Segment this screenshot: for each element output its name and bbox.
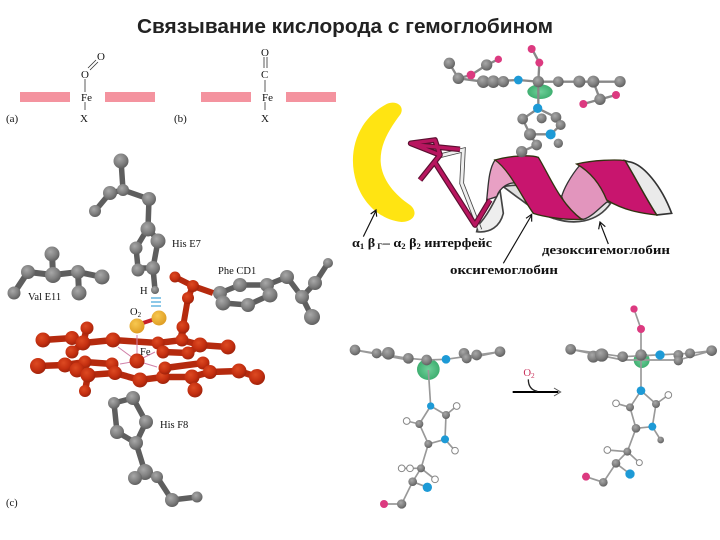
- title: Связывание кислорода с гемоглобином: [137, 16, 553, 38]
- heme plane bars b: [201, 92, 336, 102]
- reaction arrow with oxygen: [513, 368, 561, 396]
- residue: His E7: [89, 154, 166, 294]
- deoxy heme model: [350, 345, 505, 509]
- atom labels b: X: [261, 113, 269, 125]
- panel c: heme pocket ball and stick model: [6, 154, 333, 509]
- residue and atom labels c: Fe: [140, 347, 151, 358]
- atom labels b: (b): [174, 113, 187, 125]
- residue and atom labels c: Phe CD1: [218, 266, 256, 277]
- residue: His F8: [108, 391, 202, 507]
- panel a: oxygen bound to heme iron: [6, 51, 155, 125]
- panel b: carbon monoxide bound to heme iron: [174, 47, 336, 125]
- bound oxygen molecule: [130, 310, 166, 334]
- helix labels: β: [406, 235, 417, 250]
- atom labels a: O: [81, 69, 89, 81]
- atom labels b: Fe: [262, 92, 273, 104]
- pointer arrows: [363, 210, 608, 263]
- interface yellow crescent: [353, 103, 415, 222]
- atom labels a: [6, 51, 105, 125]
- helix ribbon: [411, 140, 672, 232]
- panel: deoxy to oxy transition: [350, 305, 717, 509]
- reaction arrow with oxygen: 2: [531, 371, 535, 380]
- helix labels: интерфейс: [421, 235, 492, 250]
- helix labels: дезоксигемоглобин: [542, 242, 671, 257]
- residue and atom labels c: H: [140, 286, 148, 297]
- residue and atom labels c: His E7: [172, 239, 201, 250]
- panel: helix shift diagram: [353, 45, 672, 263]
- residue and atom labels c: His F8: [160, 420, 188, 431]
- residue: Val E11: [8, 246, 110, 300]
- heme group: [30, 272, 265, 398]
- atom labels a: (a): [6, 113, 19, 125]
- helix labels: – α: [382, 235, 402, 250]
- atom labels b: C: [261, 69, 268, 81]
- helix labels: 1: [360, 242, 364, 251]
- heme plane bars a: [20, 92, 155, 102]
- atom labels a: Fe: [81, 92, 92, 104]
- atom labels a: X: [80, 113, 88, 125]
- bonds b: [264, 57, 267, 110]
- helix labels: 2: [401, 242, 406, 251]
- residue and atom labels c: Val E11: [28, 292, 61, 303]
- helix labels: β: [364, 235, 375, 250]
- helix labels: 2: [417, 242, 421, 251]
- atom labels b: O: [261, 47, 269, 59]
- helix labels: α: [352, 235, 359, 250]
- residue: Phe CD1: [213, 258, 333, 325]
- residue and atom labels c: 2: [138, 311, 142, 319]
- hydrogen bond stripes: [151, 298, 161, 306]
- helix labels: [352, 235, 671, 277]
- residue and atom labels c: [6, 239, 256, 509]
- helix labels: Γ: [375, 242, 383, 251]
- helix labels: оксигемоглобин: [450, 262, 559, 277]
- reaction arrow with oxygen: O: [523, 368, 531, 379]
- oxy heme model: [565, 305, 717, 487]
- heme with bound oxygen and histidine: [444, 45, 626, 157]
- residue and atom labels c: (c): [6, 498, 18, 509]
- atom labels a: O: [97, 51, 105, 63]
- residue and atom labels c: O: [130, 307, 138, 318]
- atom labels b: [174, 47, 273, 125]
- bonds a: [85, 60, 98, 110]
